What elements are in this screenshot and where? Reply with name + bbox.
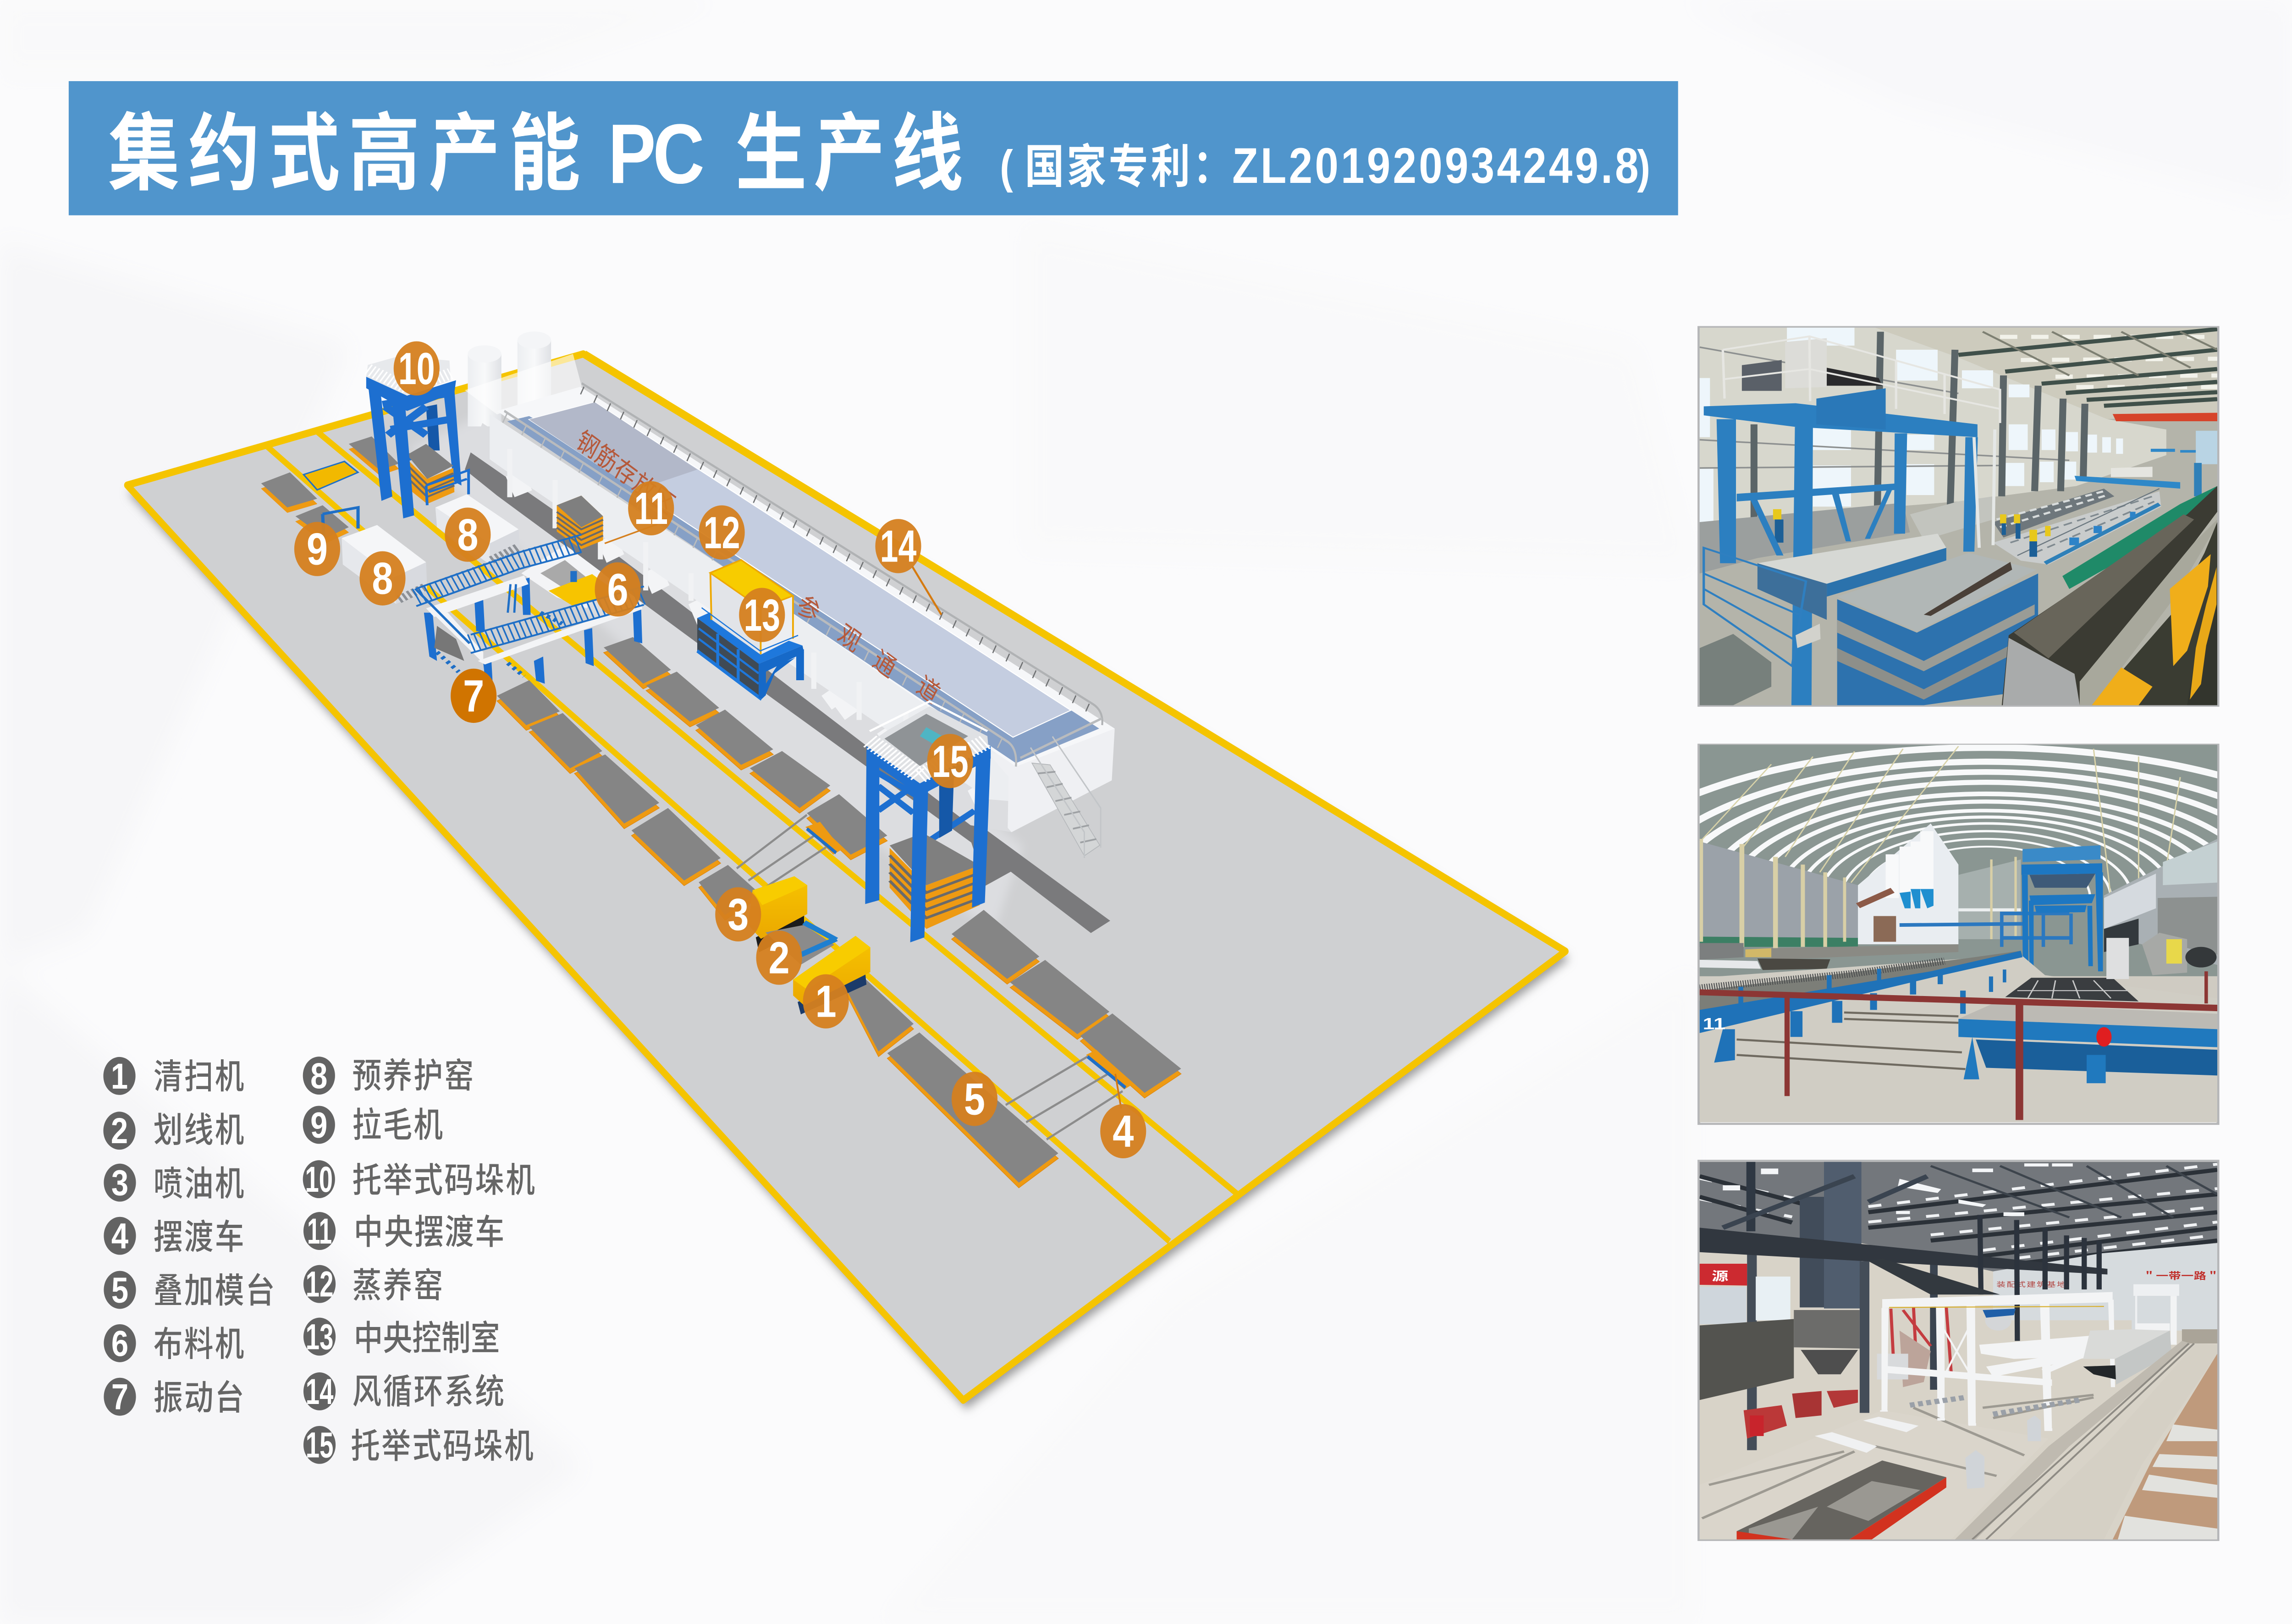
pre-curing kiln 8 rear (435, 494, 520, 564)
blue stacker gantry (2022, 845, 2103, 971)
badge 10: 10 (398, 344, 435, 394)
photo: white gantry installation: 源 (1712, 1266, 1728, 1284)
legend item 14: 14 (306, 1371, 334, 1412)
yellow transfer plates (303, 462, 358, 490)
back wall (1958, 859, 2021, 939)
troweller frame (323, 507, 358, 538)
leader line 14 (912, 566, 942, 615)
gantry legs (424, 578, 642, 684)
rack frame (697, 618, 759, 698)
machine 3 (748, 876, 807, 952)
photo: white gantry installation (1699, 1161, 2218, 1542)
legend item 7: 7 (111, 1376, 128, 1417)
legend (103, 1048, 535, 1469)
leader line 4 (1115, 1074, 1121, 1108)
control cabinets (1965, 1450, 1984, 1489)
patent number: 国家专利： (1025, 141, 1232, 193)
white ferry carts (1863, 1417, 1918, 1432)
legend item 1: 清扫机 (154, 1049, 244, 1099)
badge 1 (803, 974, 849, 1029)
floor pits and rails (1700, 1410, 2049, 1539)
roll machine (1985, 1310, 2011, 1331)
legend item 3: 3 (111, 1162, 128, 1203)
numbered callouts (294, 341, 1146, 1158)
gantry decks (426, 575, 529, 617)
long kiln (2083, 1329, 2170, 1359)
distant conveyor (1900, 914, 2073, 938)
dome (1700, 745, 2217, 976)
badge 7 (451, 669, 496, 723)
white gantry (1882, 1292, 2115, 1431)
sprayer and line scriber machines (748, 876, 871, 1014)
floor tracks (1737, 1013, 1965, 1069)
site rebar zone (2113, 1354, 2217, 1540)
vibration motors (437, 613, 562, 676)
badge 11: 11 (634, 484, 668, 534)
pre-curing kiln 8 front (342, 525, 427, 604)
legend item 9: 9 (310, 1105, 327, 1145)
rear beam (875, 761, 975, 841)
red banner (1700, 1264, 1747, 1286)
legend item 2 (103, 1102, 244, 1152)
stairs (1030, 737, 1101, 858)
legend item 12 (303, 1258, 443, 1308)
badge 8 front (359, 551, 406, 606)
patent number: ZL201920934249.8 (1232, 138, 1639, 194)
badge 8 rear (445, 507, 490, 562)
cooling tanks (465, 331, 582, 426)
legend item 9: 拉毛机 (352, 1097, 443, 1147)
badge 6 (595, 562, 641, 617)
badge 3: 3 (727, 890, 749, 940)
right wall (2104, 839, 2217, 965)
legend item 14: 风循环系统 (352, 1364, 504, 1414)
badge 6: 6 (607, 565, 628, 615)
red frame and stairs (1891, 1305, 1951, 1377)
roof label: visitor walkway: 道 (911, 666, 947, 711)
title text: 生产线 (735, 107, 963, 201)
legs (759, 663, 766, 699)
lifting frame (426, 470, 468, 505)
badge 5: 5 (964, 1074, 985, 1124)
legend item 15: 15 (306, 1425, 333, 1465)
legend item 4: 摆渡车 (154, 1210, 244, 1260)
lower wall (1700, 503, 1910, 573)
roof label: rebar storage: 钢筋存放区 (571, 420, 682, 522)
columns and truss (1747, 1162, 1755, 1231)
badge 12: 12 (704, 508, 740, 558)
roof label: visitor walkway: 观 (832, 614, 868, 659)
photo: workshop with blue stacker (1699, 327, 2218, 706)
mould number: 11 (1702, 1015, 1725, 1033)
yellow roof (710, 560, 793, 608)
legend item 10: 10 (305, 1159, 333, 1200)
dark silo (1800, 1197, 1860, 1307)
title text: 集约式高产能 (108, 107, 580, 201)
lighter ground around the kiln (409, 414, 1023, 932)
bottom moulding table (1737, 1460, 1946, 1540)
kiln columns (507, 449, 954, 780)
patent number: ) (1637, 141, 1650, 193)
concrete floor (1700, 955, 2217, 1125)
photo: white gantry installation: " 一带一路 " (2146, 1268, 2216, 1282)
back wall (1993, 1243, 2217, 1331)
roof railings (582, 383, 1102, 725)
ceiling (1875, 328, 2217, 419)
left wall (1700, 842, 1858, 939)
red crane (2113, 413, 2217, 421)
roof label: visitor walkway (792, 584, 947, 711)
legend item 5: 5 (111, 1270, 128, 1310)
legend item 1: 1 (111, 1056, 128, 1096)
wall and windows (1700, 328, 2166, 522)
ferry rails (737, 815, 1123, 1140)
legend item 4 (104, 1210, 244, 1260)
photo: arched hall with production line (1584, 745, 2292, 1125)
kiln ground blocks (506, 470, 997, 808)
stored precast panels (1700, 943, 1744, 960)
floor shadow (127, 363, 1570, 1409)
legend item 5: 叠加模台 (154, 1263, 275, 1313)
dark under kiln (2083, 1365, 2116, 1379)
legend item 4: 4 (111, 1216, 128, 1256)
legend item 8: 预养护窑 (352, 1048, 474, 1098)
machine and cabinets (2106, 938, 2129, 979)
rear legs (426, 404, 440, 451)
floor dividing lines (266, 432, 1238, 1241)
left side equipment (261, 356, 657, 684)
kiln wall (490, 414, 1010, 801)
steam kiln building (471, 383, 1115, 832)
badge 3 (715, 887, 761, 941)
legend item 3 (104, 1156, 244, 1206)
red carts (1744, 1405, 1787, 1439)
beams (383, 394, 448, 459)
legend item 9 (303, 1097, 443, 1147)
legend item 6: 布料机 (154, 1316, 244, 1366)
stacker gantry 15 (865, 701, 991, 942)
pallet stack under gantry 11 (557, 495, 603, 549)
mould pallets left row (497, 680, 1058, 1188)
left blue moulds row (1700, 951, 2022, 1033)
badge 9: 9 (307, 524, 328, 574)
ceiling (1700, 1162, 2217, 1272)
legend item 3: 喷油机 (154, 1156, 244, 1206)
blue scriber (766, 923, 836, 965)
pallet stack (890, 833, 980, 929)
roof label: visitor walkway: 通 (868, 639, 903, 685)
legend item 1 (103, 1049, 244, 1099)
left lower railing and pallet (1704, 548, 1806, 666)
concrete pit wall and walkway (1955, 1341, 2191, 1540)
factory floor plan (127, 331, 1570, 1409)
legend item 11: 11 (307, 1211, 332, 1251)
right table (1958, 1003, 2217, 1032)
legend item 12: 蒸养窑 (352, 1258, 443, 1308)
gantry top machinery (1785, 338, 1827, 388)
dark trough (2002, 486, 2217, 705)
legend item 13: 中央控制室 (354, 1310, 500, 1360)
legend item 12: 12 (306, 1264, 333, 1305)
red guard rail (1700, 989, 2217, 1011)
roof label: visitor walkway: 参 (792, 584, 827, 630)
legend item 6 (104, 1316, 244, 1366)
mould pallets right row (604, 637, 1181, 1098)
stacker gantry 10 (366, 356, 468, 518)
floor slab (127, 354, 1565, 1400)
legend item 8: 8 (310, 1056, 327, 1096)
deck (697, 612, 803, 664)
distant blue line (2075, 476, 2180, 489)
front legs (368, 382, 392, 501)
kiln ground under wall (471, 423, 1012, 832)
handrail (702, 608, 798, 651)
legend item 2: 划线机 (154, 1102, 244, 1152)
motors row (1910, 1398, 2080, 1414)
legend item 7 (104, 1370, 244, 1420)
silos (1858, 823, 1958, 944)
badge 15: 15 (932, 737, 969, 787)
badge 1: 1 (815, 977, 837, 1027)
pallet stack (407, 444, 454, 504)
central control room 13 (697, 560, 804, 699)
badge 2 (756, 930, 802, 985)
platform (868, 706, 989, 786)
rebar mesh (2005, 978, 2138, 1002)
badge 14: 14 (880, 522, 916, 572)
workers (1773, 509, 2050, 541)
top platform (366, 356, 451, 396)
legend item 6: 6 (111, 1323, 128, 1364)
ferry cars (805, 822, 1133, 1090)
dust collector (1794, 1310, 1860, 1349)
legend item 7: 振动台 (154, 1370, 244, 1420)
patent number: ( (1000, 141, 1013, 193)
legend item 15: 托举式码垛机 (351, 1419, 534, 1469)
badge 8 rear: 8 (457, 510, 478, 560)
badge 5 (952, 1072, 997, 1126)
distant gantry (2133, 1284, 2179, 1296)
pit strip (465, 452, 1110, 933)
badge 13: 13 (744, 591, 780, 641)
side pallets (261, 436, 399, 544)
gantry lower feet (1884, 1410, 2049, 1431)
legend item 2: 2 (111, 1111, 128, 1151)
badge 2: 2 (769, 933, 790, 983)
yellow-black pipes (2092, 522, 2217, 705)
spreader machine 6 (521, 545, 618, 608)
legend item 11: 中央摆渡车 (354, 1204, 504, 1254)
blue gantry columns (1704, 403, 1978, 705)
title banner (69, 81, 1678, 215)
front pallet stack (1837, 573, 2038, 705)
legend item 13: 13 (306, 1316, 333, 1357)
gantry blue handrails (416, 544, 581, 597)
leader line 11 (605, 524, 657, 544)
legs (865, 751, 879, 904)
badge 8 front: 8 (372, 554, 393, 604)
title text: PC (608, 107, 705, 201)
badge 7: 7 (463, 671, 484, 721)
machine 1 (793, 936, 871, 1014)
box faces (710, 573, 760, 655)
badge 4 (1100, 1104, 1146, 1158)
photo: white gantry installation: 装配式建筑基地 (1996, 1279, 2066, 1289)
badge 4: 4 (1113, 1107, 1134, 1157)
middle pallet (1758, 534, 1946, 584)
working tables (1993, 489, 2114, 538)
dome ribs (1700, 746, 2180, 898)
green floor (2062, 486, 2217, 589)
badge 9 (294, 522, 340, 576)
control box (1796, 624, 1820, 648)
legend item 10: 托举式码垛机 (352, 1152, 535, 1202)
left building (1700, 1287, 1747, 1324)
kiln roof (497, 387, 1115, 766)
vibrating table gantry (415, 534, 644, 684)
